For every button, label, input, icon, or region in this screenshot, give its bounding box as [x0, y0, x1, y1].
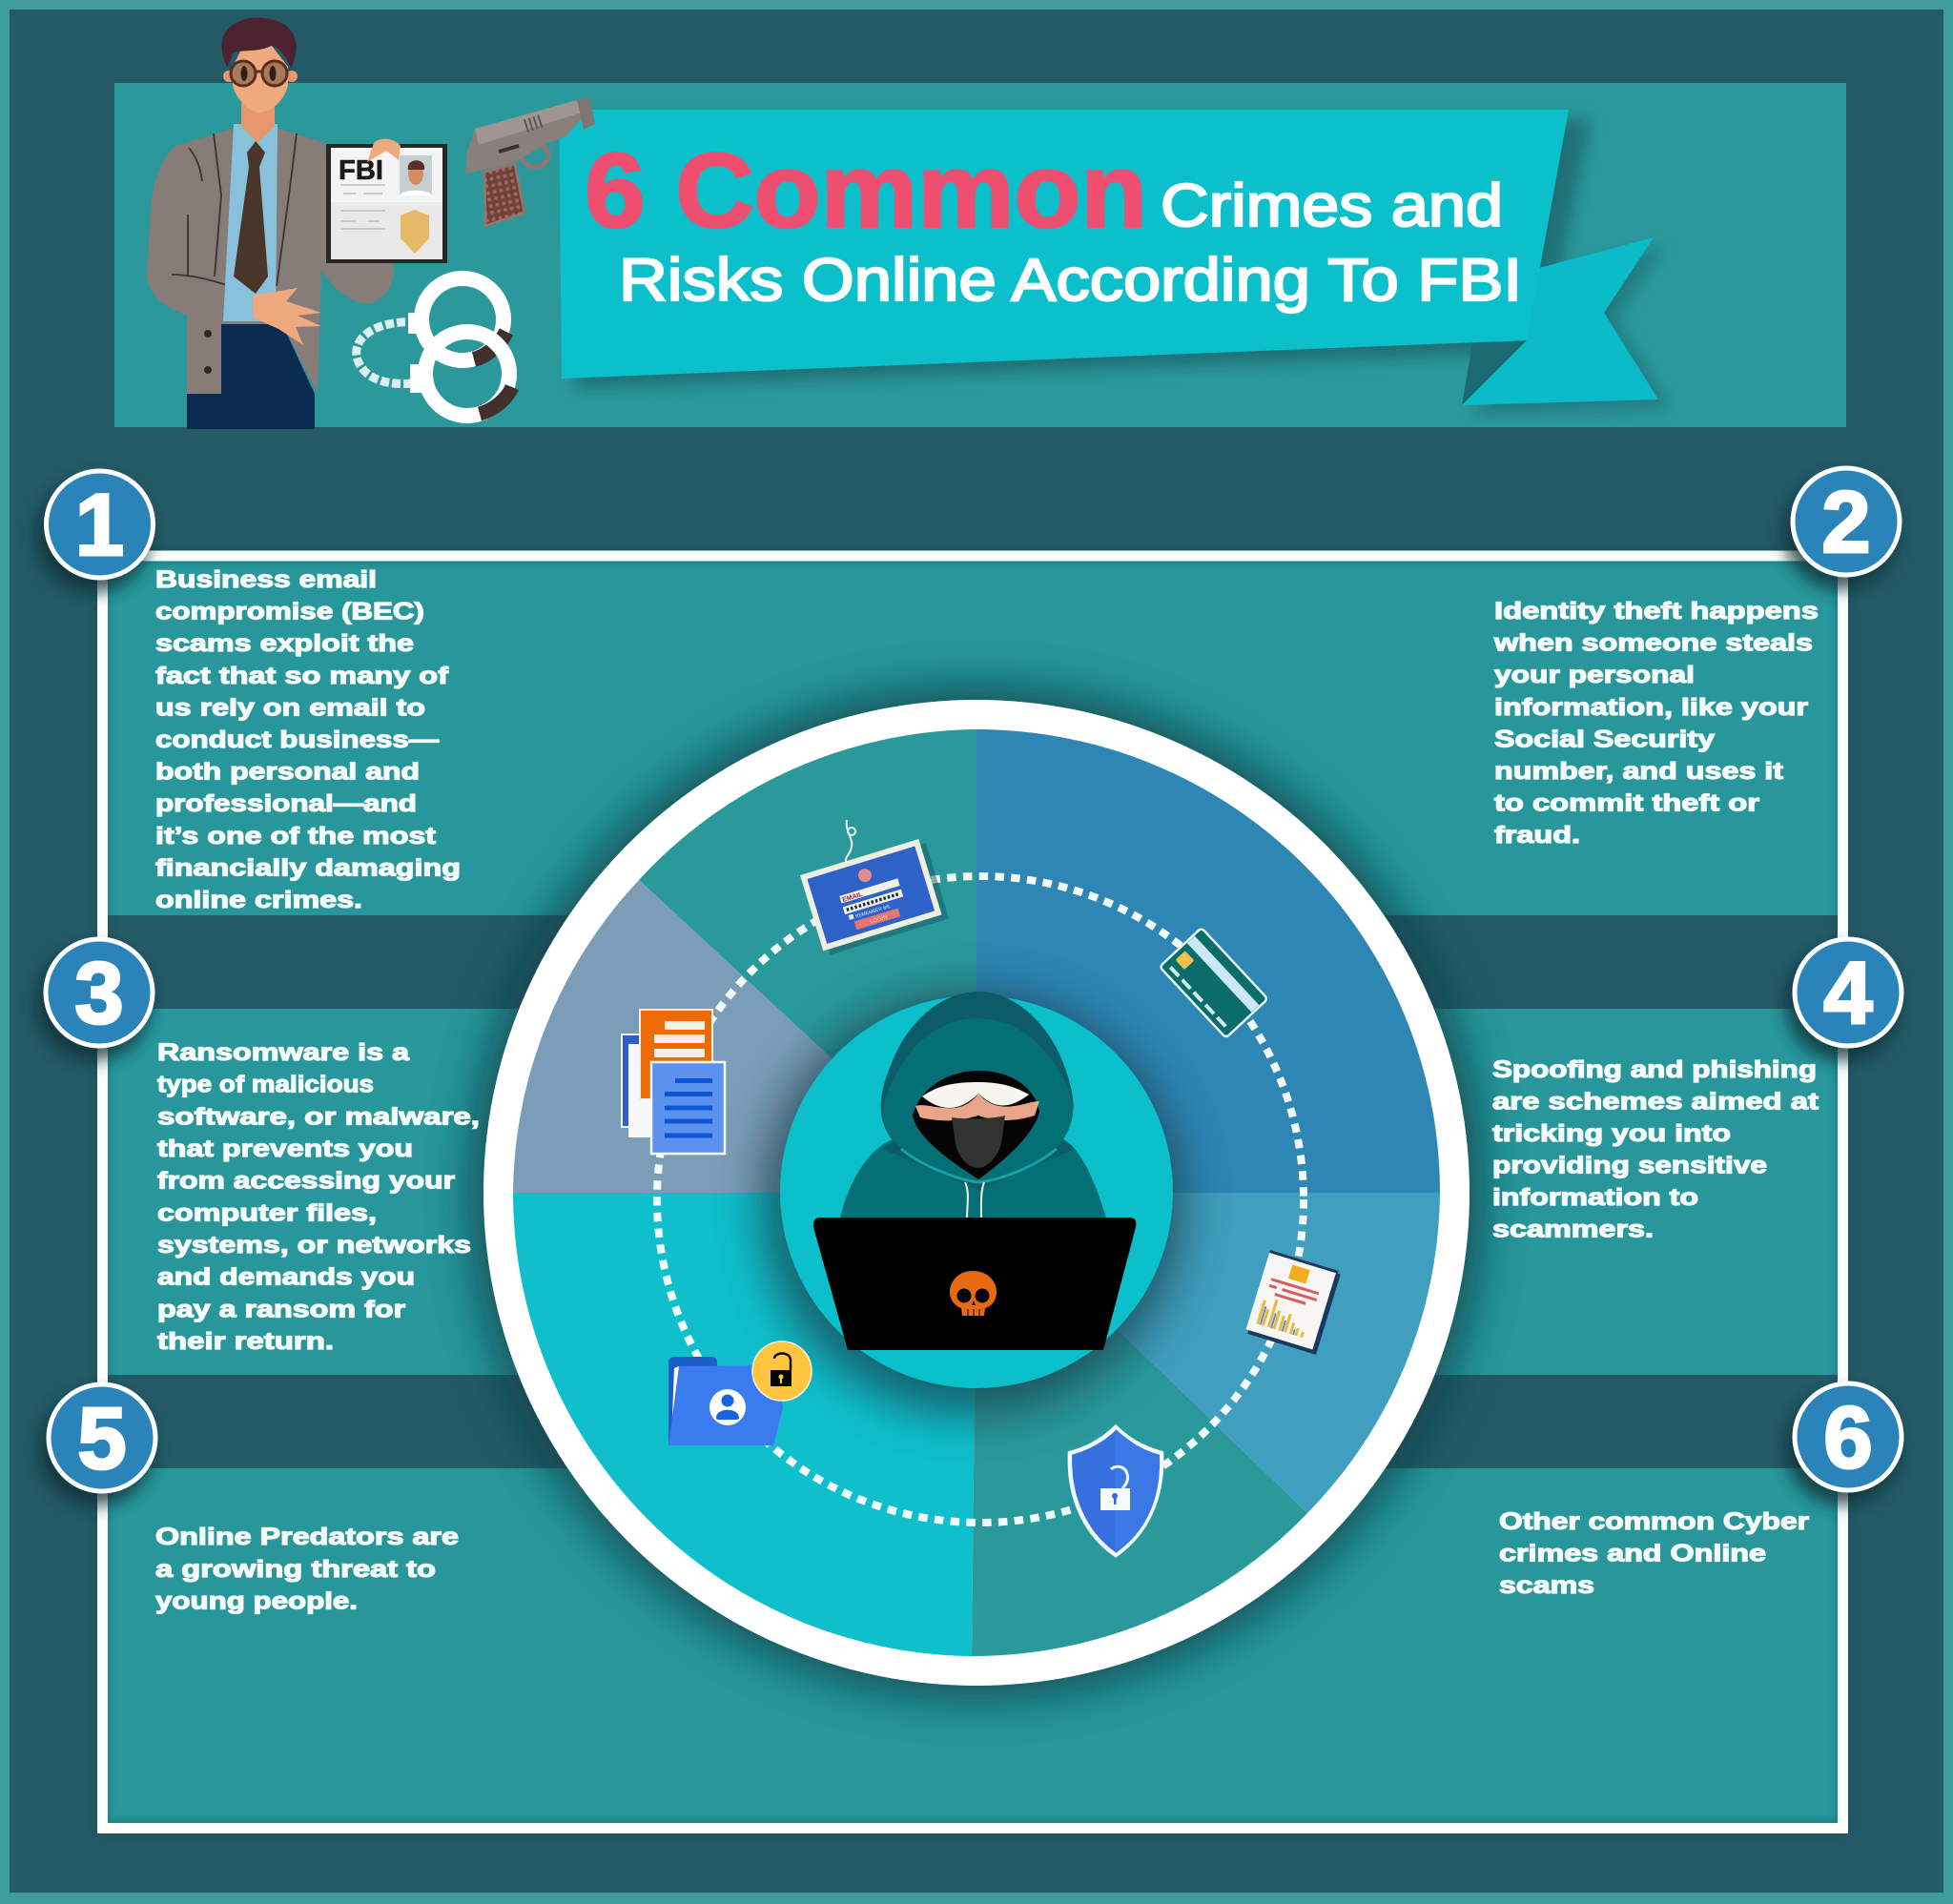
text block 5: young people. [155, 1588, 358, 1615]
text block 6 [1499, 1508, 1809, 1599]
illustration: FBI agent [147, 17, 447, 429]
text block 1: professional—and [155, 790, 417, 817]
text block 3: systems, or networks [157, 1232, 471, 1259]
text block 3: from accessing your [157, 1168, 455, 1195]
icon: phishing login card [800, 820, 949, 956]
text block 2: to commit theft or [1494, 790, 1759, 817]
icon: phishing login card: REMEMBER ME [854, 904, 892, 920]
text block 4: providing sensitive [1492, 1152, 1767, 1178]
text block 2: fraud. [1494, 822, 1580, 849]
number badge 2 [1783, 468, 1900, 590]
icon: file stack [622, 1010, 725, 1154]
text block 5: a growing threat to [155, 1556, 436, 1583]
text block 3: that prevents you [157, 1136, 413, 1162]
fingers [367, 139, 401, 162]
segment 1: teal [639, 729, 976, 1193]
number badge 6 [1785, 1383, 1902, 1505]
title text [585, 133, 1522, 314]
chart: central ring with six segments [483, 700, 1470, 1686]
text block 6: Other common Cyber [1499, 1508, 1809, 1535]
segment 5: cyan [513, 1193, 976, 1656]
number badge 2: 2 [1821, 474, 1871, 571]
text block 2: when someone steals [1493, 630, 1813, 657]
icon: credit card [1160, 928, 1267, 1038]
title text: Risks Online According To FBI [619, 247, 1522, 314]
text block 2: your personal [1494, 662, 1695, 688]
text block 1: financially damaging [155, 854, 461, 881]
ears [223, 71, 298, 82]
neck [241, 103, 275, 143]
text block 1: us rely on email to [155, 694, 425, 721]
text block 3: pay a ransom for [157, 1296, 405, 1322]
dashed orbit [657, 876, 1304, 1523]
head [233, 46, 288, 113]
text block 3: type of malicious [157, 1072, 374, 1098]
text block 4: Spoofing and phishing [1492, 1056, 1817, 1083]
face opening [913, 1071, 1039, 1179]
text block 1: scams exploit the [155, 630, 414, 657]
number badge 4: 4 [1823, 945, 1873, 1042]
mask [952, 1116, 1005, 1168]
text block 4 [1492, 1056, 1819, 1243]
shirt [223, 124, 278, 321]
number badge 3 [36, 939, 153, 1061]
icon: shield with padlock [1070, 1427, 1162, 1555]
text block 4: are schemes aimed at [1492, 1089, 1819, 1116]
segment 2: blue [976, 729, 1440, 1193]
text block 3: computer files, [157, 1199, 377, 1226]
text block 1: it’s one of the most [155, 823, 437, 850]
text block 2: number, and uses it [1494, 758, 1784, 785]
goggles [922, 1082, 1029, 1108]
text block 3: software, or malware, [157, 1103, 480, 1130]
text block 3: their return. [157, 1328, 334, 1355]
segment 3: grey blue [513, 880, 976, 1193]
text block 4: tricking you into [1492, 1120, 1731, 1147]
hand [253, 288, 321, 345]
text block 5 [155, 1524, 459, 1615]
icon: report document [1244, 1250, 1342, 1355]
text block 1: Business email [155, 566, 377, 593]
number badge 6: 6 [1823, 1389, 1873, 1486]
icon: handcuffs [357, 278, 512, 416]
hub circle [780, 995, 1173, 1388]
number badge 3: 3 [74, 945, 124, 1042]
text block 1: both personal and [155, 759, 420, 786]
text block 2: information, like your [1494, 694, 1808, 721]
text block 1: fact that so many of [155, 663, 449, 689]
white frame [102, 556, 1842, 1829]
icon: phishing login card: EMAIL [842, 891, 864, 904]
skin band [915, 1094, 1039, 1120]
text block 2: Identity theft happens [1494, 598, 1819, 624]
number badge 5: 5 [77, 1390, 127, 1487]
hair [222, 17, 297, 69]
FBI document: FBI [339, 155, 383, 186]
text block 4: scammers. [1492, 1217, 1654, 1243]
circle drop shadow [471, 687, 1482, 1698]
illustration: hooded hacker [813, 992, 1136, 1350]
number badge 4 [1785, 939, 1902, 1061]
panels: text rows [108, 561, 1838, 1823]
text block 6: scams [1499, 1572, 1594, 1599]
icon: phishing login card: LOGIN [870, 914, 888, 925]
jacket [147, 127, 394, 394]
segment 4: light blue [976, 1193, 1440, 1513]
panel: header band [114, 83, 1846, 427]
text block 3 [157, 1039, 480, 1355]
hoodie strings [965, 1182, 984, 1218]
trousers [187, 324, 315, 429]
text block 1 [155, 566, 461, 913]
text block 6: crimes and Online [1499, 1541, 1766, 1567]
text block 1: online crimes. [155, 887, 362, 913]
tie [234, 141, 268, 294]
icon: skull [950, 1271, 997, 1316]
laptop [813, 1218, 1136, 1350]
glasses [231, 61, 287, 86]
text block 1: compromise (BEC) [155, 599, 424, 625]
text block 2 [1493, 598, 1819, 849]
text block 5: Online Predators are [155, 1524, 459, 1550]
icon: handgun [465, 96, 595, 226]
text block 4: information to [1492, 1184, 1698, 1211]
text block 3: and demands you [157, 1264, 415, 1291]
icon: locked folder [668, 1341, 812, 1445]
text block 1: conduct business— [155, 727, 439, 753]
title text: 6 Common [585, 133, 1147, 250]
text block 2: Social Security [1494, 726, 1715, 752]
text block 3: Ransomware is a [157, 1039, 410, 1066]
number badge 1: 1 [75, 477, 124, 574]
title text: Crimes and [1161, 173, 1503, 239]
number badge 5 [39, 1384, 155, 1506]
title ribbon [559, 110, 1669, 415]
hub shadow [761, 992, 1184, 1415]
number badge 1 [36, 471, 153, 593]
shoulders [840, 1139, 1106, 1218]
segment 6: teal [972, 1193, 1307, 1656]
FBI document [326, 139, 447, 263]
hood [881, 992, 1074, 1182]
